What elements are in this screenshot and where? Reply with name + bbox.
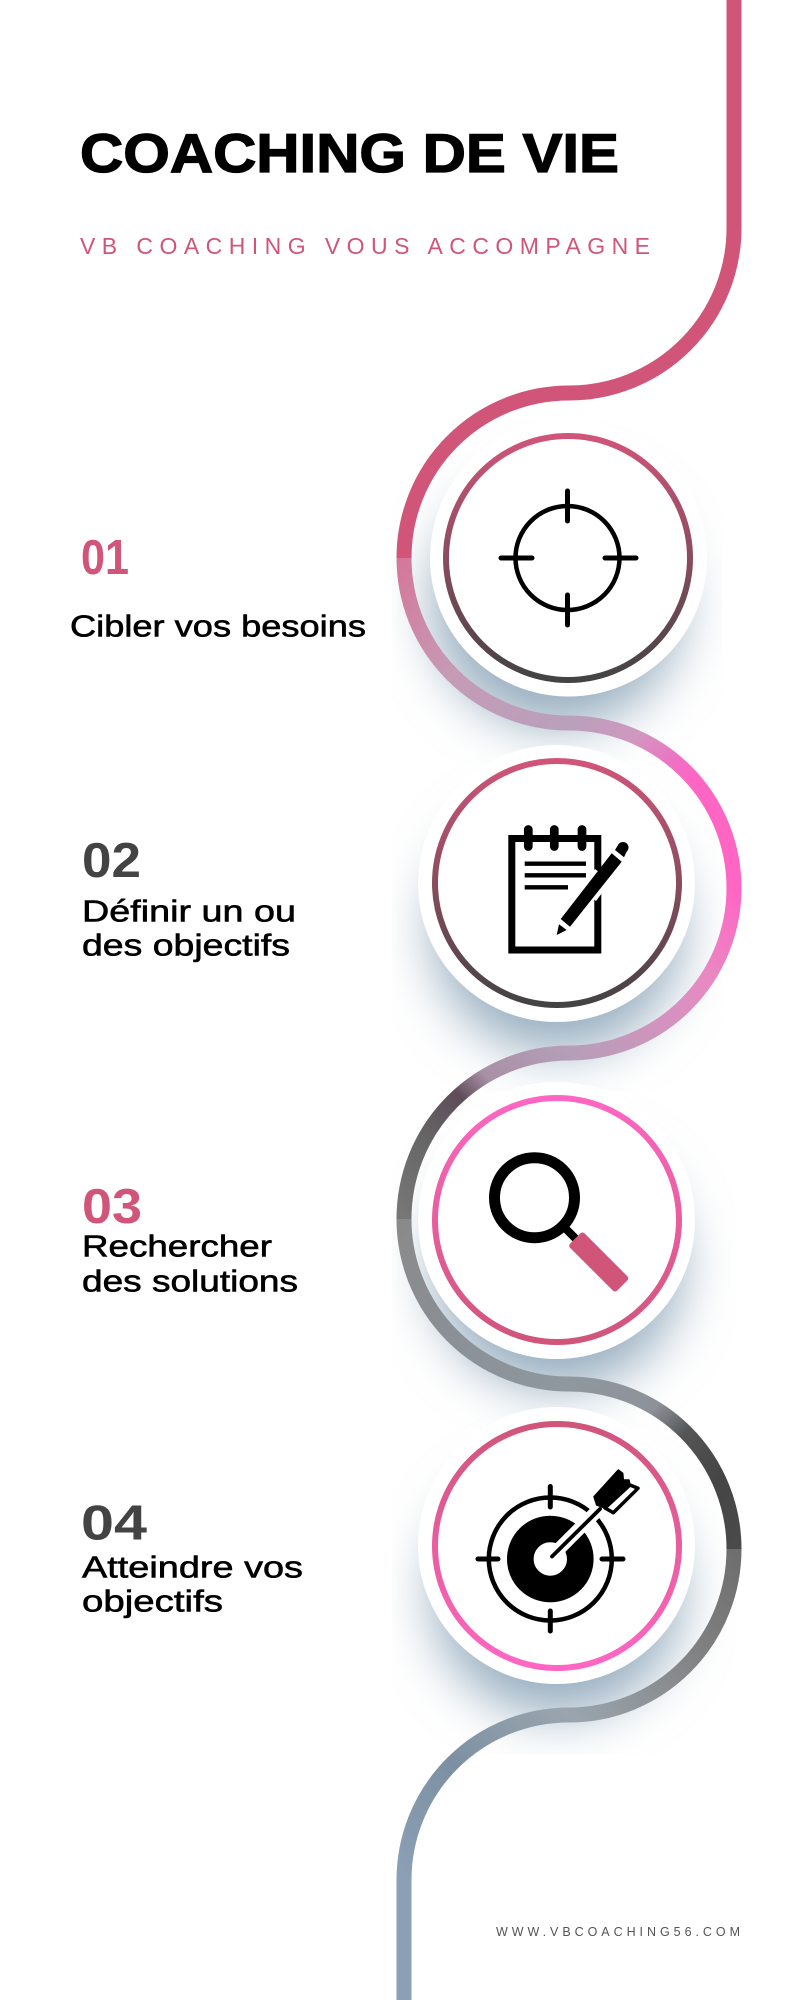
step 2 text: 02 xyxy=(82,834,141,888)
icon: magnifying glass xyxy=(494,1158,629,1293)
step 4 circle xyxy=(418,1407,695,1684)
step 1 text: Cibler vos besoins xyxy=(70,608,366,644)
step 3 text: 03 xyxy=(82,1180,142,1234)
footer website: WWW.VBCOACHING56.COM xyxy=(496,1925,740,1939)
step 4 text: 04 xyxy=(81,1496,147,1550)
step 2 text: Définir un ou xyxy=(82,894,296,928)
winding gradient path xyxy=(404,0,734,2000)
step 4 text: Atteindre vos xyxy=(82,1550,303,1584)
step 1 text: 01 xyxy=(81,531,129,585)
step 2 text xyxy=(82,834,296,962)
step 3 circle xyxy=(418,1082,695,1359)
icon: notepad and pencil xyxy=(512,830,628,950)
step 3 text xyxy=(82,1180,298,1298)
subtitle: VB COACHING VOUS ACCOMPAGNE xyxy=(80,233,650,259)
circle drop shadows xyxy=(432,478,682,1716)
step 2 circle xyxy=(418,745,695,1022)
step 4 text xyxy=(81,1496,303,1618)
icon: target with arrow xyxy=(478,1470,638,1631)
icon: crosshair xyxy=(501,491,636,625)
title: COACHING DE VIE xyxy=(80,122,619,184)
step 4 text: objectifs xyxy=(82,1584,223,1618)
step 3 text: des solutions xyxy=(82,1264,298,1298)
step 3 text: Rechercher xyxy=(82,1228,272,1264)
step 1 circle xyxy=(430,420,707,696)
step 2 text: des objectifs xyxy=(82,928,290,962)
step 1 text xyxy=(70,531,366,644)
